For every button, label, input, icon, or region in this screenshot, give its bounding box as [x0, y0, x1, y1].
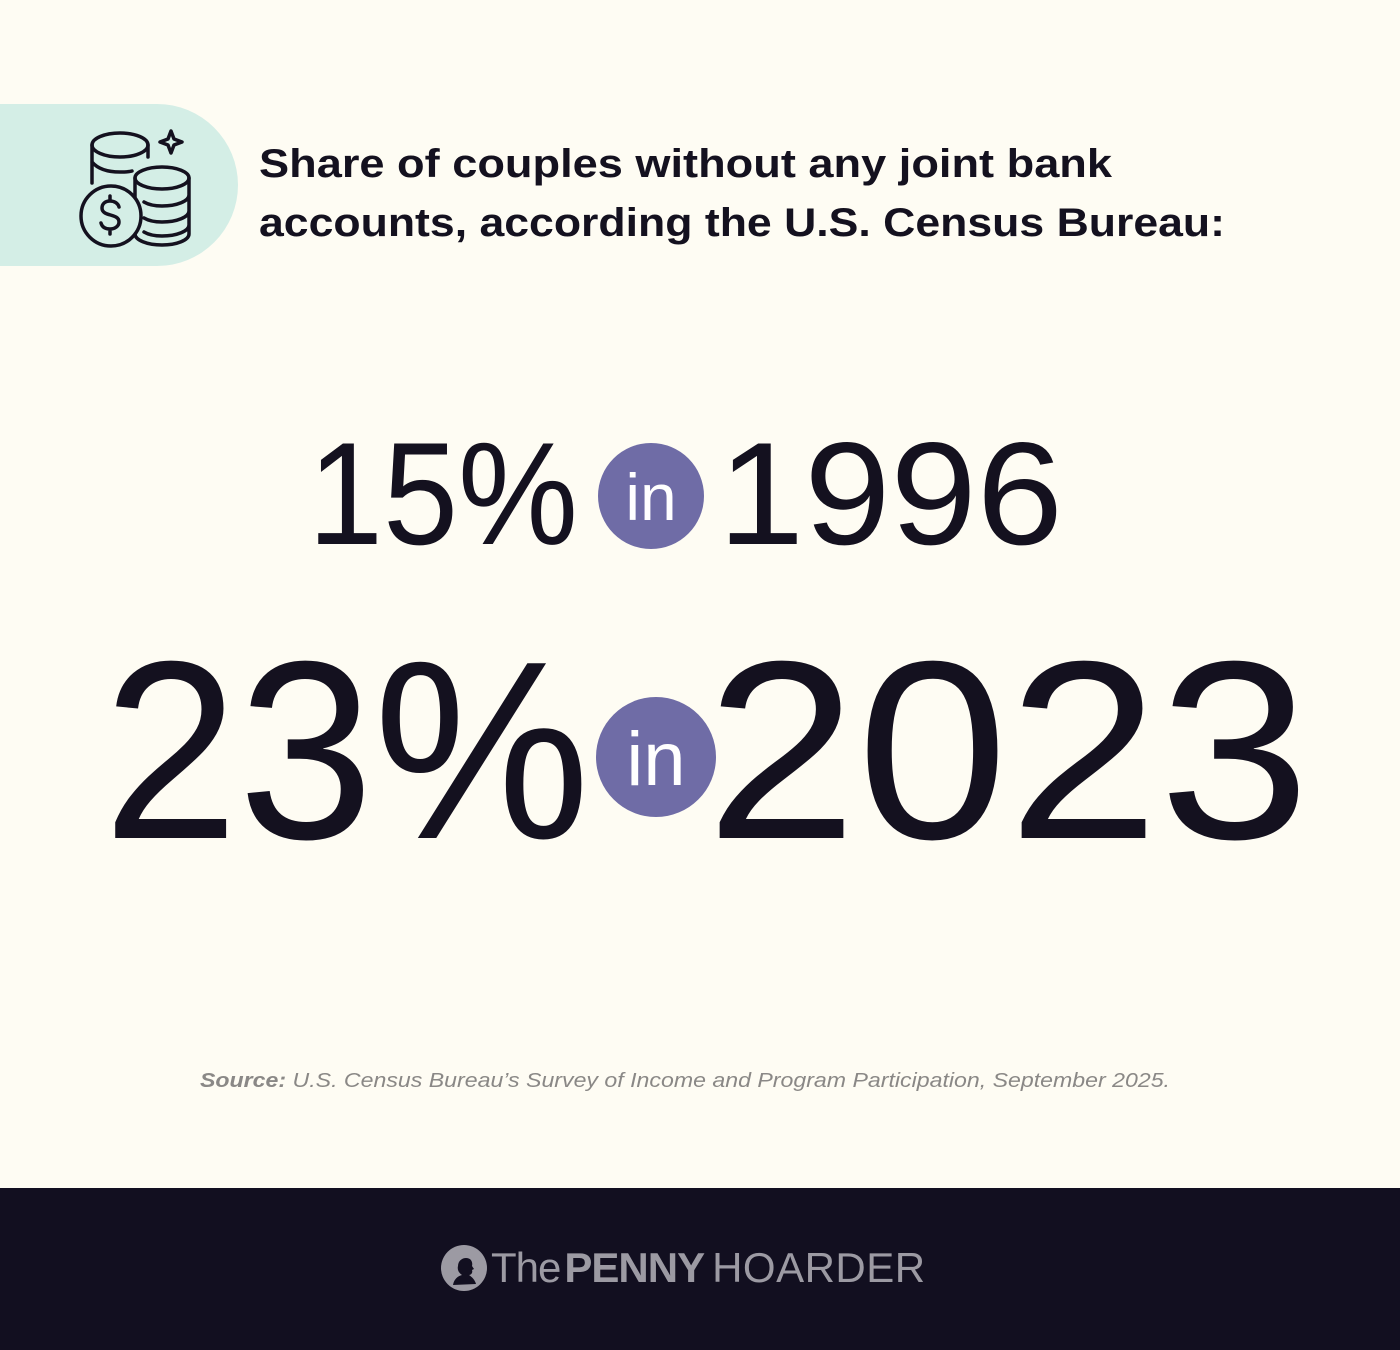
source note: Source: U.S. Census Bureau’s Survey of Income and Program Participation, September 2025. [200, 1070, 1170, 1092]
stats [103, 412, 1310, 892]
stat: 15% in 1996: 15% [308, 412, 578, 575]
stat: 15% in 1996: 1996 [718, 412, 1063, 575]
title: accounts, according the U.S. Census Bureau: [259, 201, 1225, 245]
stat: 15% in 1996: in [625, 460, 677, 534]
header icon badge [0, 104, 238, 266]
stat: 15% in 1996 [308, 412, 1063, 575]
footer [0, 1188, 1400, 1350]
stat: 23% in 2023: 23% [103, 608, 590, 892]
icon: profile coin [441, 1245, 487, 1291]
stat: 23% in 2023 [103, 608, 1310, 892]
logo: HOARDER [712, 1244, 926, 1291]
title [259, 142, 1225, 245]
icon: coin stacks [79, 129, 191, 248]
stat: 23% in 2023: 2023 [706, 608, 1310, 892]
logo [441, 1244, 926, 1291]
logo: PENNY [564, 1244, 704, 1291]
logo: The [491, 1244, 560, 1291]
title: Share of couples without any joint bank [259, 142, 1113, 186]
stat: 23% in 2023: in [626, 717, 686, 802]
